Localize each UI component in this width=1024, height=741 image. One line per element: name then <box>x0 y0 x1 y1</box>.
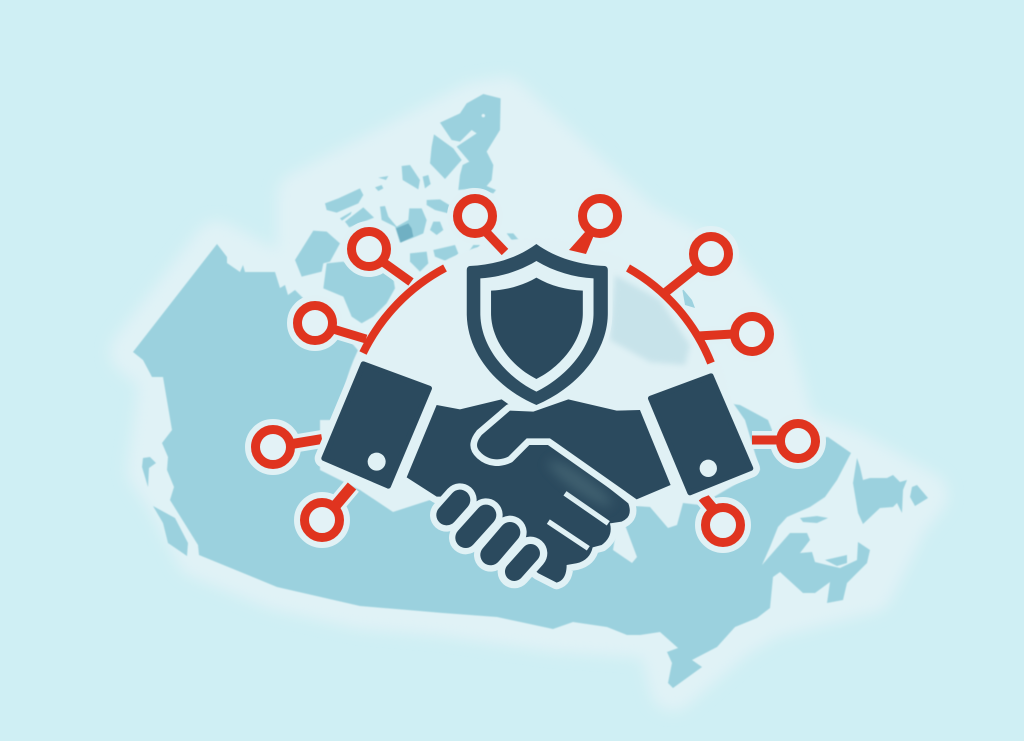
left cuff <box>324 364 429 486</box>
small island inside the right arc <box>682 288 695 308</box>
shield <box>467 244 608 405</box>
Haida Gwaii <box>142 457 156 487</box>
left hand finger slits <box>548 493 608 548</box>
shield outer <box>467 244 608 405</box>
shield inner ring <box>480 261 594 392</box>
protective arc: right <box>628 268 711 363</box>
Vancouver Island <box>153 506 188 556</box>
fingers <box>447 500 531 572</box>
mainland <box>133 244 870 688</box>
Hudson Bay tint <box>610 275 690 365</box>
Arctic islands <box>295 94 522 323</box>
map halo <box>133 100 925 688</box>
protective arc: left <box>363 268 445 353</box>
right cuff <box>651 376 751 493</box>
left hand <box>407 399 630 583</box>
Anticosti and Prince Edward islands <box>800 516 828 523</box>
right hand with thumb <box>477 399 671 499</box>
network pins <box>247 190 824 551</box>
pin rings and stems <box>256 198 816 542</box>
handshake <box>324 364 751 583</box>
Newfoundland <box>853 458 907 524</box>
shield core <box>491 278 583 379</box>
map of Canada <box>133 94 928 688</box>
pin halos <box>247 190 824 551</box>
knuckle highlight <box>544 455 616 512</box>
pale central area <box>320 238 760 563</box>
